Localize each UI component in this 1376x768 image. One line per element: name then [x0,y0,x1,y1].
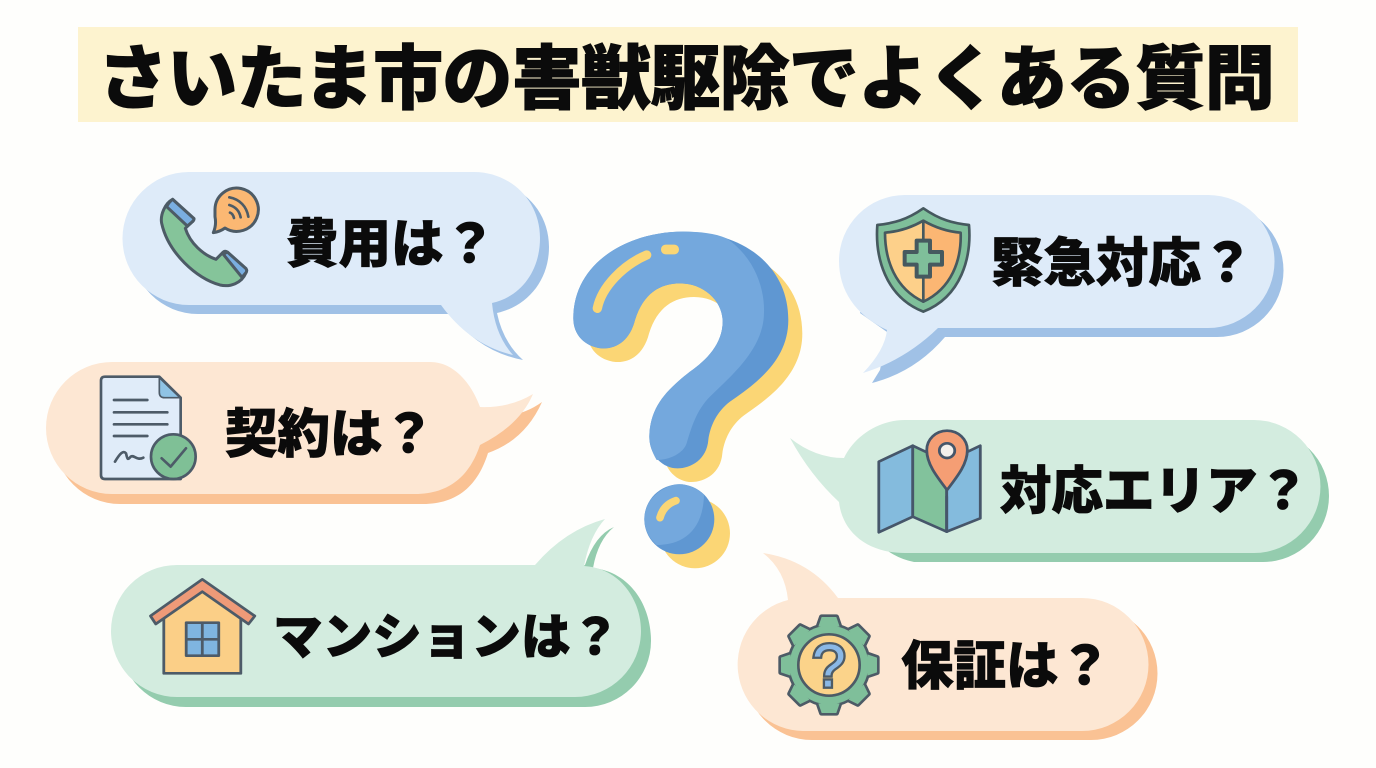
panel: cost question bubble [123,172,549,360]
label: cost: 費用は？ [286,215,496,274]
icon: shield with cross [877,208,969,312]
icon: gear with question mark: ? [812,632,846,699]
speech bubble shape [46,362,542,504]
panel: apartment question bubble [111,519,651,707]
icon: telephone with signal balloon [161,188,258,286]
title banner: さいたま市の害獣駆除でよくある質問 [98,40,1274,118]
speech bubble shape [738,553,1158,740]
panel: service area question bubble [790,420,1329,562]
label: apartment: マンションは？ [273,609,620,665]
label: service area: 対応エリア？ [1000,462,1309,520]
panel: contract question bubble [46,362,542,504]
icon: contract document with check [101,377,196,479]
label: emergency: 緊急対応？ [991,234,1254,293]
panel: warranty question bubble [738,553,1158,740]
label: warranty: 保証は？ [901,637,1111,696]
speech bubble shape [123,172,549,360]
speech bubble shape [111,519,651,707]
speech bubble shape [839,195,1284,383]
panel: emergency question bubble [839,195,1284,383]
icon: gear with question mark [781,617,877,713]
speech bubble shape [790,420,1329,562]
label: contract: 契約は？ [225,405,435,464]
icon: house [150,579,255,673]
central question mark [573,232,802,568]
icon: map with pin [879,431,980,532]
